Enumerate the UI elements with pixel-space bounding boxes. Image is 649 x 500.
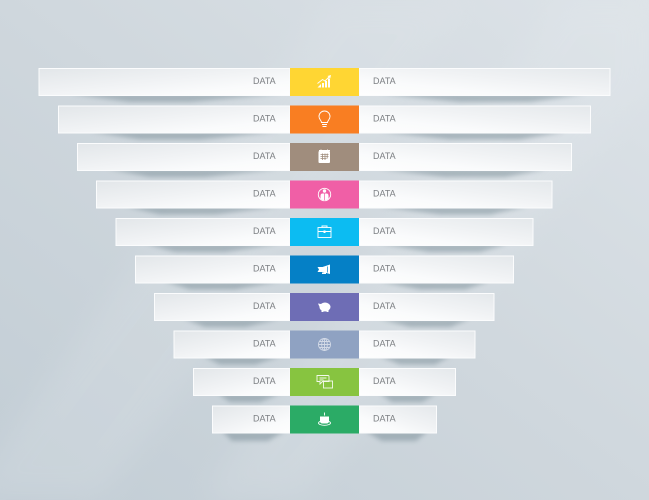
- icon: chat bubbles: [317, 376, 332, 388]
- row 3 right label: DATA: [373, 151, 396, 161]
- row 4 right panel: [359, 181, 552, 208]
- icon: megaphone: [318, 264, 330, 274]
- row 4 left label: DATA: [253, 188, 276, 198]
- row 5 right label: DATA: [373, 226, 396, 236]
- icon: globe: [318, 338, 330, 350]
- row 8 right label: DATA: [373, 338, 396, 348]
- icon: calendar: [318, 150, 330, 163]
- row 9 left label: DATA: [253, 376, 276, 386]
- row 8 left panel: [174, 331, 290, 358]
- row 5 left label: DATA: [253, 226, 276, 236]
- row 3 left label: DATA: [253, 151, 276, 161]
- row 9: [194, 368, 456, 396]
- row 7 left label: DATA: [253, 301, 276, 311]
- row 2: [58, 106, 590, 134]
- row 3 colour block: [290, 143, 359, 171]
- row 5 left panel: [116, 218, 290, 246]
- row 3: [78, 143, 572, 171]
- icon: coffee cup: [318, 412, 330, 425]
- row 2 right label: DATA: [373, 114, 396, 124]
- row 7: [154, 293, 494, 321]
- icon: piggy bank: [318, 302, 330, 312]
- row 8: [174, 330, 475, 358]
- row 3 left panel: [78, 144, 290, 170]
- icon: briefcase: [318, 226, 331, 238]
- row 6 left label: DATA: [253, 264, 276, 274]
- row 6: [136, 256, 514, 284]
- row 10 left label: DATA: [253, 414, 276, 424]
- row 10 right panel: [359, 406, 436, 433]
- row 2 colour block: [290, 106, 359, 134]
- row 6 right label: DATA: [373, 264, 396, 274]
- row 4 left panel: [96, 181, 290, 208]
- icon: light bulb: [319, 111, 330, 126]
- row 1: [39, 68, 610, 96]
- row 5 colour block: [290, 218, 359, 246]
- row 10 left panel: [212, 406, 290, 433]
- icon: person in circle: [318, 188, 331, 201]
- row 9 colour block: [290, 368, 359, 396]
- row 8 left label: DATA: [253, 338, 276, 348]
- row 10: [212, 406, 436, 434]
- icon: growth chart: [318, 75, 331, 88]
- row 7 right label: DATA: [373, 301, 396, 311]
- row 8 colour block: [290, 330, 359, 358]
- row 3 right panel: [359, 144, 572, 170]
- row 1 colour block: [290, 68, 359, 96]
- row 7 right panel: [359, 294, 494, 320]
- row 1 right panel: [359, 68, 610, 96]
- row 8 right panel: [359, 331, 475, 358]
- row 9 right panel: [359, 368, 456, 396]
- row 4 right label: DATA: [373, 188, 396, 198]
- panel shadows: [70, 94, 585, 441]
- row 10 colour block: [290, 406, 359, 434]
- row 4 colour block: [290, 180, 359, 208]
- row 6 colour block: [290, 256, 359, 284]
- row 1 right label: DATA: [373, 76, 396, 86]
- row 1 left label: DATA: [253, 76, 276, 86]
- row 6 right panel: [359, 256, 514, 283]
- row 6 left panel: [136, 256, 290, 283]
- row 2 left label: DATA: [253, 114, 276, 124]
- row 1 left panel: [39, 68, 290, 96]
- row 9 right label: DATA: [373, 376, 396, 386]
- row 2 right panel: [359, 106, 590, 133]
- row 2 left panel: [58, 106, 290, 133]
- row 5: [116, 218, 533, 246]
- row 7 left panel: [154, 294, 290, 320]
- row 5 right panel: [359, 218, 533, 246]
- row 10 right label: DATA: [373, 414, 396, 424]
- row 9 left panel: [194, 368, 290, 396]
- row 7 colour block: [290, 293, 359, 321]
- row 4: [96, 180, 552, 208]
